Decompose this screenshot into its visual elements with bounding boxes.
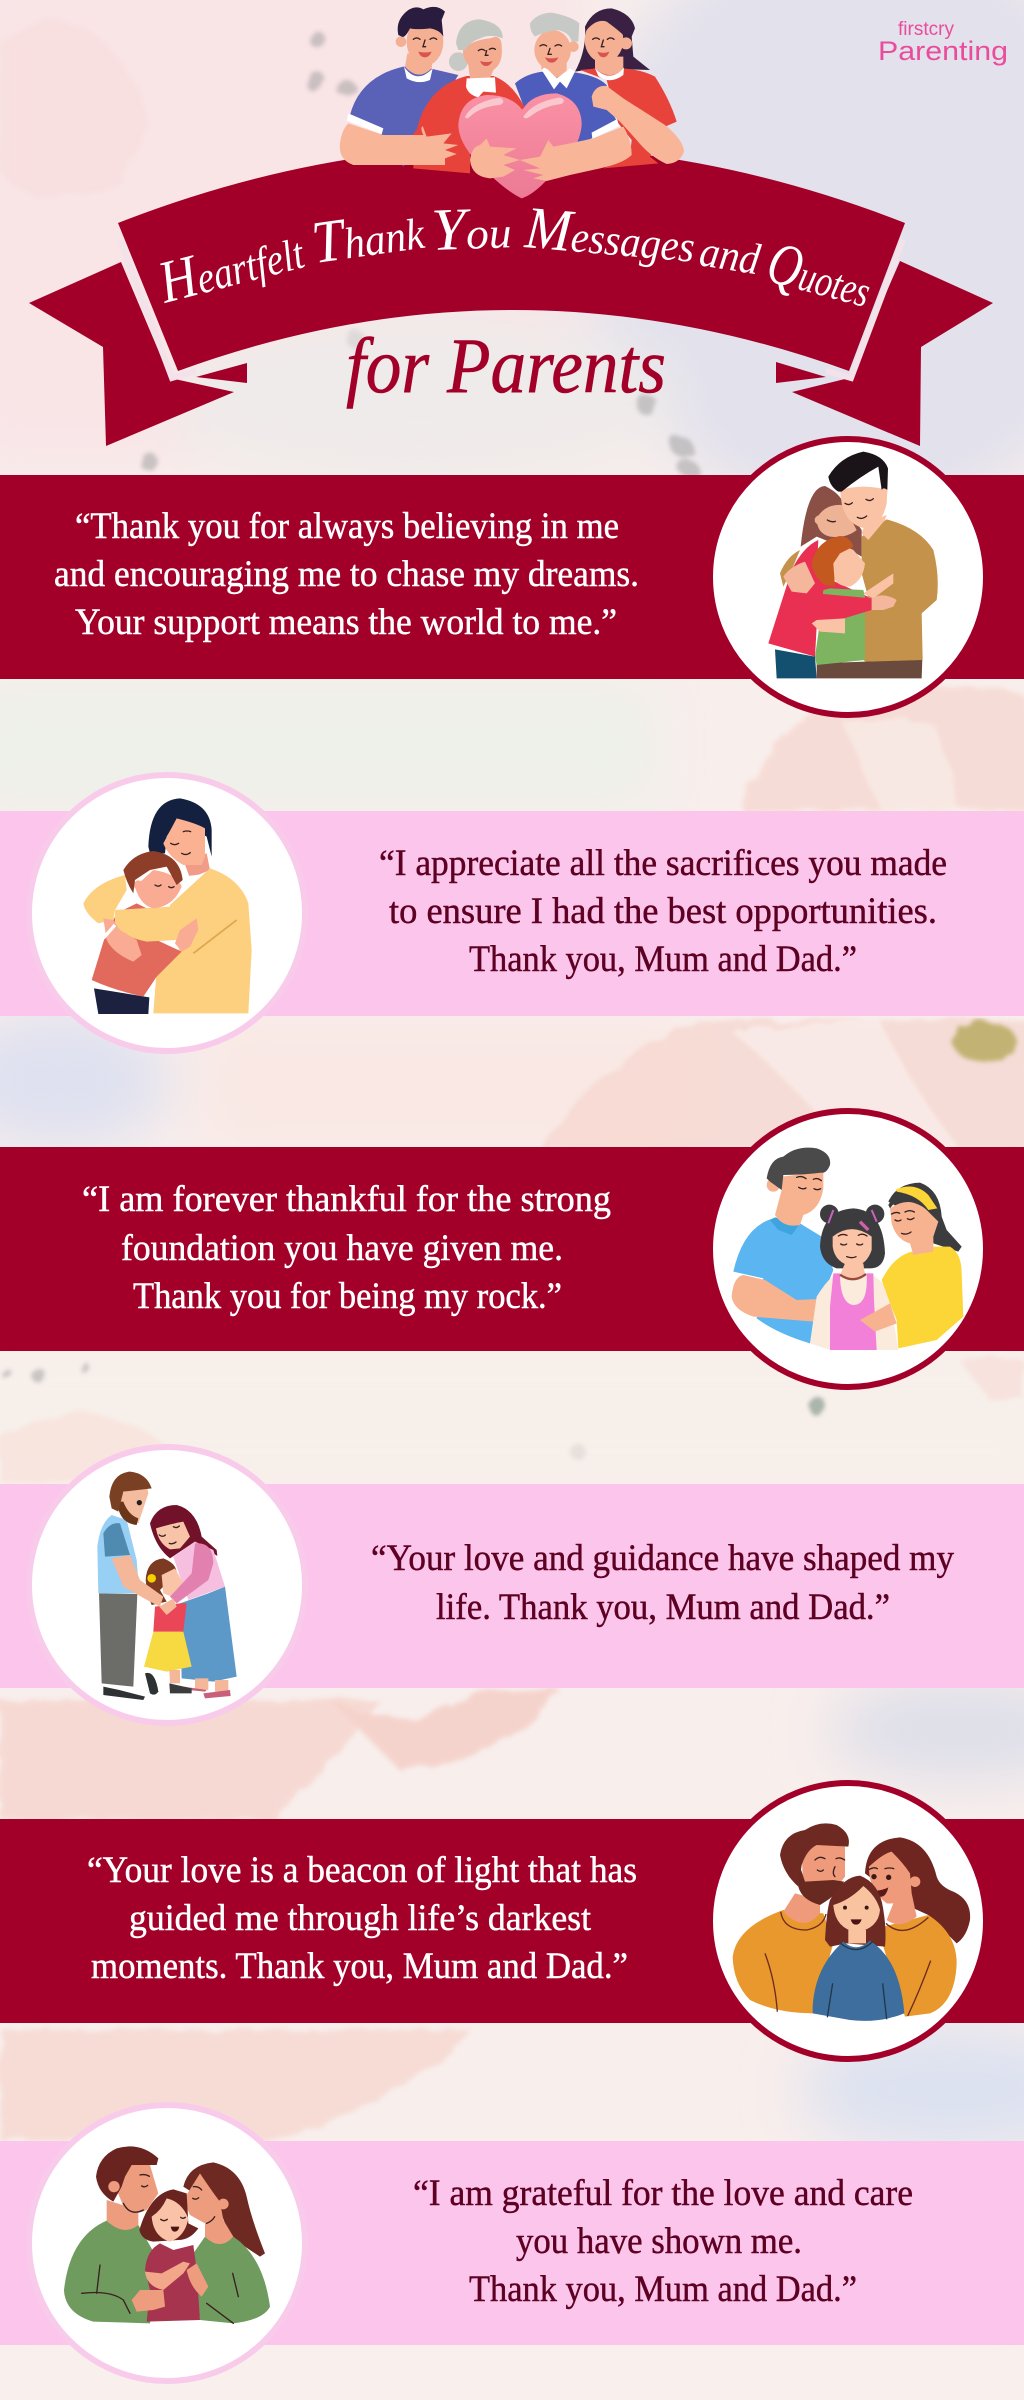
panel: quote 4: [0, 1447, 1024, 1723]
medallion: [710, 1111, 986, 1387]
grandfather: [515, 13, 620, 143]
subtitle: for Parents: [346, 322, 666, 409]
illustration: family holding a heart: [340, 7, 684, 198]
title: [151, 194, 879, 320]
quote text: you have shown me.: [516, 2221, 802, 2262]
young woman: [575, 8, 677, 168]
quote text: [82, 1179, 611, 1317]
quote text: Your support means the world to me.”: [75, 602, 617, 643]
quote text: [87, 1850, 637, 1987]
quote text: guided me through life’s darkest: [129, 1898, 592, 1939]
ribbon folds: [196, 362, 826, 383]
quote text: “Thank you for always believing in me: [75, 506, 619, 547]
quote text: “I am forever thankful for the strong: [82, 1179, 611, 1220]
heart: [458, 93, 582, 198]
band: [0, 1147, 1024, 1351]
icon: parents with child: [733, 1823, 970, 2021]
title: Messages: [522, 194, 698, 275]
hands on heart: [470, 86, 684, 181]
logo: Parenting: [878, 36, 1008, 66]
ribbon left tail: [29, 262, 234, 446]
icon: parents kissing child: [64, 2146, 270, 2323]
panel: quote 1: [0, 439, 1024, 715]
medallion: [29, 2105, 305, 2381]
quote text: to ensure I had the best opportunities.: [389, 891, 937, 932]
title: Thank: [308, 195, 429, 276]
title: and: [696, 226, 764, 284]
panel: quote 2: [0, 775, 1024, 1051]
band: [0, 811, 1024, 1016]
quote text: Thank you for being my rock.”: [133, 1276, 562, 1317]
medallion: [29, 1447, 305, 1723]
quote text: and encouraging me to chase my dreams.: [54, 554, 639, 595]
ribbon right tail: [792, 261, 993, 446]
title: Heartfelt: [151, 215, 311, 316]
panel: quote 5: [0, 1783, 1024, 2059]
quote text: [379, 843, 947, 980]
icon: parents with daughter: [732, 1148, 963, 1350]
band: [0, 1484, 1024, 1688]
grandmother: [413, 19, 525, 173]
icon: parents with little girl: [97, 1472, 237, 1700]
panel: quote 6: [0, 2105, 1024, 2381]
quote text: [413, 2173, 913, 2310]
logo: [878, 19, 1008, 66]
band: [0, 2141, 1024, 2345]
quote text: foundation you have given me.: [121, 1228, 563, 1269]
medallion: [29, 775, 305, 1051]
medallion: [710, 1783, 986, 2059]
title: Quotes: [761, 229, 879, 320]
quote text: “I appreciate all the sacrifices you made: [379, 843, 947, 884]
quote text: moments. Thank you, Mum and Dad.”: [91, 1946, 628, 1987]
icon: mother hugging son: [83, 798, 252, 1014]
logo: firstcry: [898, 19, 954, 40]
petal centre: [953, 1022, 1017, 1062]
left arm: [340, 123, 458, 165]
ribbon outline: [120, 240, 903, 378]
quote text: life. Thank you, Mum and Dad.”: [436, 1587, 890, 1628]
quote text: Thank you, Mum and Dad.”: [469, 939, 857, 980]
band: [0, 475, 1024, 679]
header ribbon banner: [29, 146, 993, 446]
panel: quote 3: [0, 1111, 1024, 1387]
quote text: “Your love and guidance have shaped my: [371, 1538, 954, 1579]
ribbon centre: [118, 146, 905, 371]
paint splatter: [3, 32, 824, 1460]
quote text: Thank you, Mum and Dad.”: [469, 2269, 857, 2310]
quote text: “Your love is a beacon of light that has: [87, 1850, 637, 1891]
title: You: [430, 194, 512, 263]
icon: father mother and son hugging: [768, 452, 938, 678]
young man: [347, 7, 458, 167]
quote text: “I am grateful for the love and care: [413, 2173, 913, 2214]
quote text: [371, 1538, 954, 1628]
band: [0, 1819, 1024, 2023]
medallion: [710, 439, 986, 715]
quote text: [54, 506, 639, 643]
